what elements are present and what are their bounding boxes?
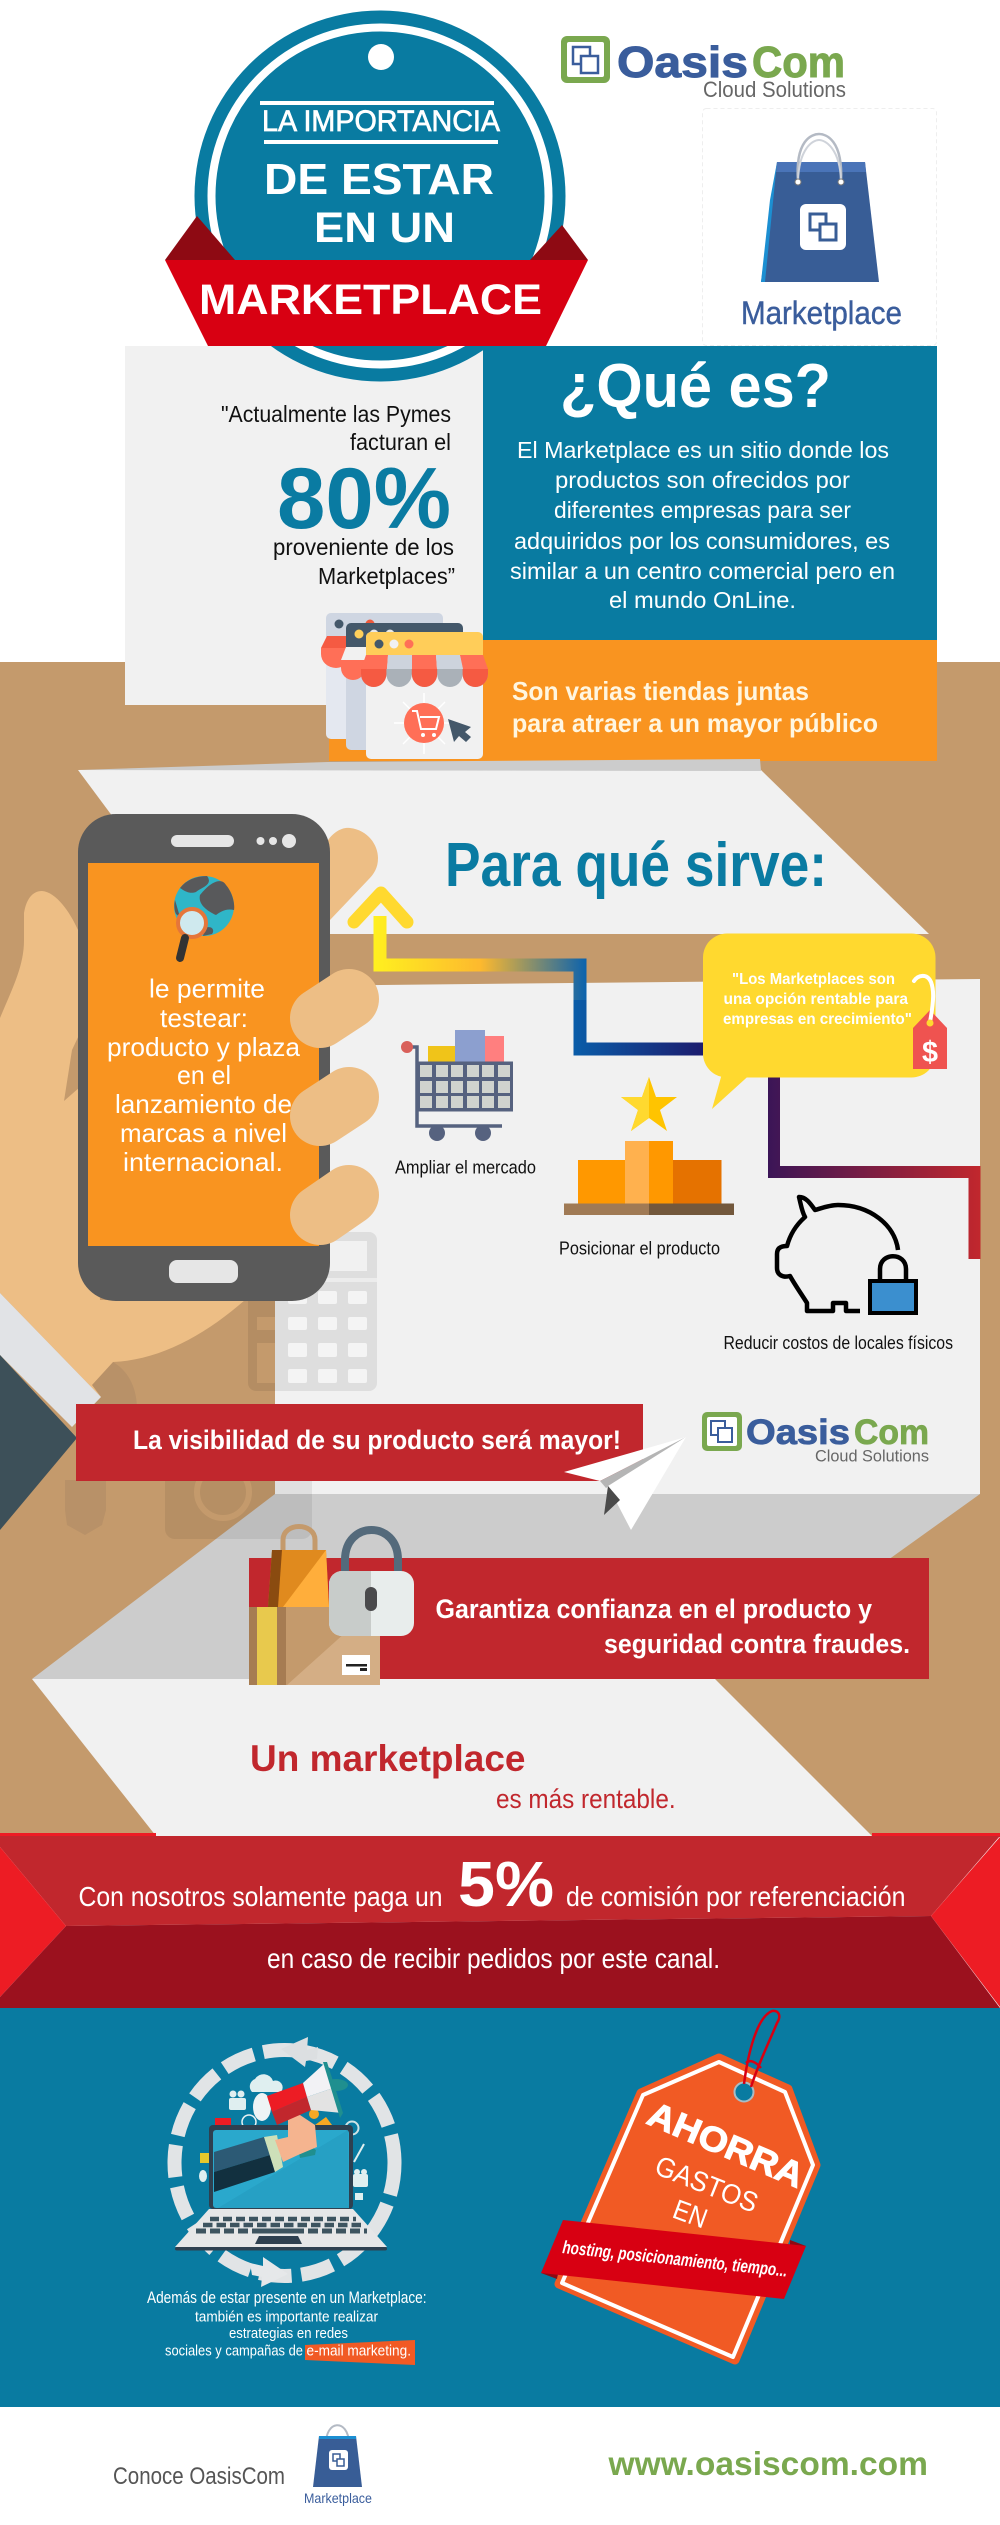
highlight: e-mail marketing — [305, 2340, 415, 2365]
icon: piggy bank with lock — [777, 1197, 916, 1313]
text block: phone — [107, 974, 301, 1177]
text block: 80% quote: "Actualmente las Pymes — [221, 401, 451, 427]
panel: para que sirve lower — [275, 979, 980, 1494]
icon: globe with magnifier — [174, 876, 234, 958]
band: hosting — [790, 2240, 806, 2246]
banner: garantiza — [249, 1558, 929, 1679]
title block: EN UN — [314, 204, 455, 252]
title block: DE ESTAR — [264, 155, 494, 204]
panel: teal footer — [0, 2008, 1000, 2407]
text block: definition: el mundo OnLine. — [609, 587, 796, 613]
icon: shopping bag — [761, 134, 879, 282]
title: marketplace: MARKETPLACE — [199, 276, 542, 324]
panel: un marketplace — [32, 1679, 872, 1836]
label: posicionar el producto: Posicionar el producto — [559, 1238, 720, 1258]
price tag: ahorra: hosting, posicionamiento, tiempo... — [562, 2237, 788, 2281]
text block: 80% quote: proveniente de los — [273, 534, 454, 560]
text block: 80% quote — [221, 401, 455, 589]
brown background — [0, 662, 1000, 1837]
text block: ademas: sociales y campañas de — [165, 2342, 303, 2360]
text: gastos: GASTOS — [651, 2150, 763, 2219]
hand — [0, 891, 245, 1397]
phone — [78, 814, 330, 1301]
label: small marketplace: Marketplace — [304, 2490, 372, 2506]
text block: phone: lanzamiento de — [115, 1089, 292, 1119]
text block: phone: marcas a nivel — [120, 1118, 287, 1148]
logo: OasisCom: Cloud Solutions — [703, 77, 846, 102]
text block: phone: internacional. — [123, 1147, 283, 1177]
text: ahorra: AHORRA — [642, 2095, 810, 2196]
label: Marketplace: Marketplace — [741, 295, 902, 331]
ribbon — [165, 216, 588, 346]
text block: definition: adquiridos por los consumidores, es — [514, 528, 890, 554]
banner: comision — [0, 1833, 1000, 2008]
banner: garantiza: Garantiza confianza en el producto y — [436, 1594, 872, 1624]
banner: visibilidad: La visibilidad de su producto será mayor! — [133, 1425, 621, 1455]
logo: OasisCom small: Com — [854, 1413, 929, 1452]
text: son varias tiendas — [512, 676, 878, 738]
marketplace box — [702, 108, 936, 346]
website url: www.oasiscom.com — [607, 2445, 928, 2482]
logo: OasisCom: Oasis — [617, 38, 748, 87]
text: un marketplace — [250, 1738, 676, 1814]
heading: para que sirve: Para qué sirve: — [445, 831, 827, 900]
heading: que es: ¿Qué es? — [560, 352, 831, 421]
icon: paper plane — [564, 1437, 686, 1530]
text block: ademas — [147, 2288, 426, 2365]
icon: podium — [564, 1077, 734, 1215]
text block: phone: le permite — [149, 974, 265, 1004]
label: reducir costos: Reducir costos de locales físicos — [724, 1333, 953, 1353]
badge circle — [194, 10, 566, 382]
text: un marketplace: Un marketplace — [250, 1738, 526, 1779]
faint camera and bulb — [65, 1362, 312, 1539]
banner: garantiza: seguridad contra fraudes. — [604, 1629, 910, 1659]
brown wedge by thumb — [64, 1033, 80, 1101]
text: en: EN — [669, 2194, 712, 2234]
connector: purple to red — [774, 1070, 974, 1259]
text block: definition: diferentes empresas para ser — [554, 497, 851, 523]
banner: comision: Con nosotros solamente paga un — [78, 1881, 442, 1912]
logo: OasisCom — [561, 36, 846, 102]
text block: ademas: e-mail marketing. — [306, 2342, 411, 2360]
text block: definition: similar a un centro comercial pero en — [510, 558, 895, 584]
callout: "Los Marketplaces son — [732, 971, 895, 988]
panel: orange strip — [329, 640, 937, 761]
text: son varias tiendas: Son varias tiendas juntas — [512, 676, 809, 706]
faint calculator — [248, 1232, 377, 1391]
callout: empresas en crecimiento" — [723, 1011, 912, 1028]
icon: box with bag and lock — [249, 1526, 414, 1685]
icon: cart — [401, 1030, 513, 1141]
text block: phone: testear: — [160, 1003, 248, 1033]
logo: OasisCom small — [702, 1412, 929, 1466]
fingers — [320, 999, 349, 1215]
callout: una opción rentable para — [724, 991, 908, 1008]
icon: price tag: $ — [922, 1036, 938, 1069]
logo: OasisCom: Com — [752, 38, 845, 87]
connector: yellow to blue — [354, 893, 703, 1049]
banner: visibilidad — [76, 1404, 643, 1481]
text block: 80% quote: Marketplaces” — [318, 563, 455, 589]
panel: grey chevron — [32, 1494, 980, 1679]
text block: ademas: Además de estar presente en un Marketplace: — [147, 2288, 426, 2307]
logo: OasisCom small: Oasis — [746, 1413, 850, 1452]
banner: comision: en caso de recibir pedidos por este canal. — [267, 1943, 720, 1974]
text: son varias tiendas: para atraer a un mayor público — [512, 708, 878, 738]
text block: ademas: estrategias en redes — [229, 2325, 348, 2342]
label: ampliar el mercado: Ampliar el mercado — [395, 1158, 536, 1178]
sleeve — [0, 1293, 101, 1530]
title block — [260, 101, 500, 252]
icon: laptop with megaphone — [174, 2037, 394, 2287]
icon: small bag — [313, 2425, 362, 2487]
number: 80%: 80% — [277, 451, 451, 547]
logo: OasisCom small: Cloud Solutions — [815, 1446, 929, 1466]
text block: ademas: también es importante realizar — [195, 2308, 378, 2326]
text block: 80% quote: facturan el — [350, 429, 451, 455]
text block: definition: El Marketplace es un sitio donde los — [517, 437, 889, 463]
text block: definition: productos son ofrecidos por — [555, 467, 850, 493]
text block: definition — [510, 437, 895, 613]
text block: phone: en el — [177, 1060, 231, 1090]
finger: top — [325, 828, 378, 920]
callout — [703, 934, 947, 1109]
title block: LA IMPORTANCIA — [262, 105, 500, 138]
text: es mas rentable: es más rentable. — [496, 1784, 676, 1814]
grey band — [78, 759, 761, 771]
panel: quote background — [125, 346, 483, 705]
footer: conoce: Conoce OasisCom — [113, 2463, 285, 2490]
icon: shops — [321, 613, 488, 759]
price tag: ahorra — [541, 2011, 816, 2360]
text block: phone: producto y plaza — [107, 1032, 301, 1062]
panel: que es — [483, 346, 937, 640]
icon: price tag — [913, 976, 947, 1069]
number: 5%: 5% — [458, 1848, 554, 1920]
panel: para que sirve upper — [78, 770, 929, 934]
banner: comision: de comisión por referenciación — [566, 1881, 906, 1912]
